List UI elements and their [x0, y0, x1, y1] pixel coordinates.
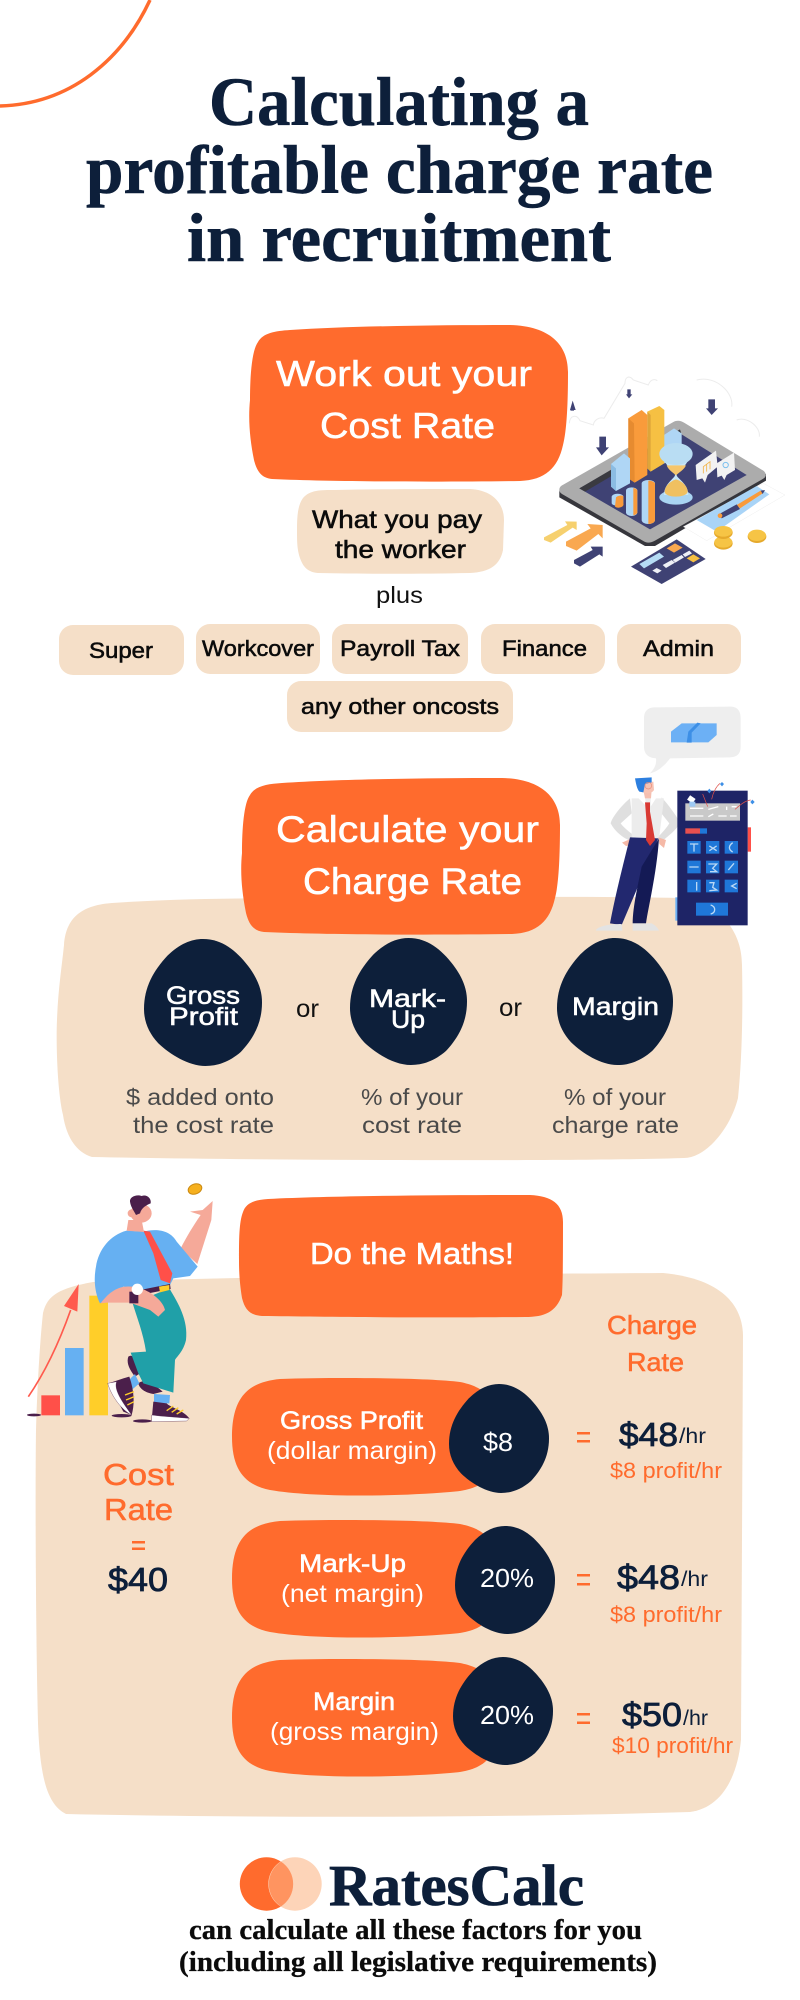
chip: finance — [481, 624, 605, 674]
text: or: or — [499, 994, 522, 1022]
heading: do the maths: Do the Maths! — [310, 1236, 514, 1271]
footer text: (including all legislative requirements) — [179, 1946, 657, 1978]
row: margin: (gross margin) — [270, 1718, 439, 1746]
text box: what you pay the worker: the worker — [335, 536, 466, 564]
descriptions: the cost rate — [133, 1112, 274, 1138]
title: in recruitment — [187, 200, 611, 276]
row: mark-up: 20% — [480, 1563, 534, 1593]
row: mark-up: $8 profit/hr — [610, 1602, 722, 1627]
panel: calculate your charge rate — [57, 778, 742, 1160]
option: gross profit: Gross — [166, 982, 240, 1010]
chip: any other oncosts — [287, 681, 513, 732]
heading: work out your cost rate — [249, 325, 568, 482]
row: gross profit: Gross Profit — [280, 1407, 423, 1435]
panel: do the maths — [36, 1195, 743, 1817]
title: Calculating a — [209, 64, 589, 140]
label: cost rate equals $40: $40 — [108, 1561, 168, 1598]
chip: any other oncosts: any other oncosts — [301, 694, 499, 719]
option: gross profit: Profit — [169, 1003, 238, 1031]
decorative arc — [0, 0, 150, 106]
row: gross profit: /hr — [679, 1425, 706, 1448]
label: cost rate equals $40 — [103, 1457, 174, 1598]
label: charge rate: Charge — [607, 1310, 697, 1340]
row: mark-up — [232, 1520, 722, 1638]
chip: admin: Admin — [643, 636, 714, 661]
chip: payroll tax — [332, 624, 468, 674]
row: margin — [232, 1657, 733, 1777]
chip: finance: Finance — [502, 636, 587, 661]
label: charge rate — [607, 1310, 697, 1377]
logo: ratescalc: RatesCalc — [329, 1853, 584, 1918]
row: mark-up: Mark-Up — [299, 1550, 406, 1578]
footer text — [179, 1914, 657, 1978]
descriptions: cost rate — [362, 1112, 462, 1138]
row: margin: 20% — [480, 1700, 534, 1730]
chip: super: Super — [89, 638, 153, 663]
option: gross profit — [144, 939, 262, 1066]
footer text: can calculate all these factors for you — [189, 1914, 642, 1946]
descriptions: $ added onto — [126, 1084, 274, 1110]
text box: what you pay the worker: What you pay — [312, 506, 483, 534]
row: mark-up: /hr — [681, 1568, 708, 1591]
heading: calculate your charge rate: Calculate your — [276, 809, 539, 850]
option: mark-up — [350, 938, 467, 1065]
heading: do the maths — [239, 1195, 563, 1317]
descriptions: % of your — [564, 1084, 666, 1110]
row: margin: /hr — [683, 1707, 708, 1730]
chip: admin — [617, 624, 741, 674]
label: cost rate equals $40: Rate — [104, 1492, 173, 1527]
title — [86, 64, 713, 276]
text box: what you pay the worker — [297, 489, 504, 574]
label: cost rate equals $40: Cost — [103, 1457, 174, 1492]
descriptions: charge rate — [552, 1112, 679, 1138]
chip: super — [59, 625, 184, 675]
chip: payroll tax: Payroll Tax — [340, 636, 460, 661]
row: mark-up: $48 — [617, 1559, 680, 1597]
chips: oncosts — [59, 624, 741, 732]
heading: work out your cost rate: Work out your — [276, 353, 532, 394]
text: or: or — [296, 995, 319, 1023]
option: mark-up: Mark- — [369, 985, 446, 1013]
text: plus: plus — [376, 582, 423, 608]
option: mark-up: Up — [391, 1006, 425, 1034]
row: margin: $10 profit/hr — [612, 1733, 733, 1758]
chip: workcover: Workcover — [202, 636, 314, 661]
row: gross profit: (dollar margin) — [267, 1437, 437, 1465]
heading: calculate your charge rate — [241, 778, 560, 935]
heading: work out your cost rate: Cost Rate — [320, 405, 495, 446]
label: charge rate: Rate — [627, 1347, 684, 1377]
row: mark-up: (net margin) — [281, 1580, 424, 1608]
title: profitable charge rate — [86, 132, 713, 208]
row: gross profit: $8 profit/hr — [610, 1458, 722, 1483]
illustration: man with calculator — [596, 707, 755, 931]
option: margin: Margin — [572, 993, 659, 1021]
option: margin — [557, 938, 673, 1065]
illustration: man leaning on bar chart — [27, 1182, 213, 1423]
illustration: tablet with charts — [544, 377, 785, 584]
row: gross profit: $48 — [619, 1416, 678, 1453]
chip: workcover — [196, 624, 320, 674]
row: gross profit — [232, 1378, 722, 1496]
heading: calculate your charge rate: Charge Rate — [303, 861, 522, 902]
row: margin: $50 — [622, 1696, 682, 1733]
descriptions — [126, 1084, 679, 1138]
descriptions: % of your — [361, 1084, 463, 1110]
row: margin: Margin — [313, 1688, 395, 1716]
row: gross profit: $8 — [483, 1427, 513, 1457]
